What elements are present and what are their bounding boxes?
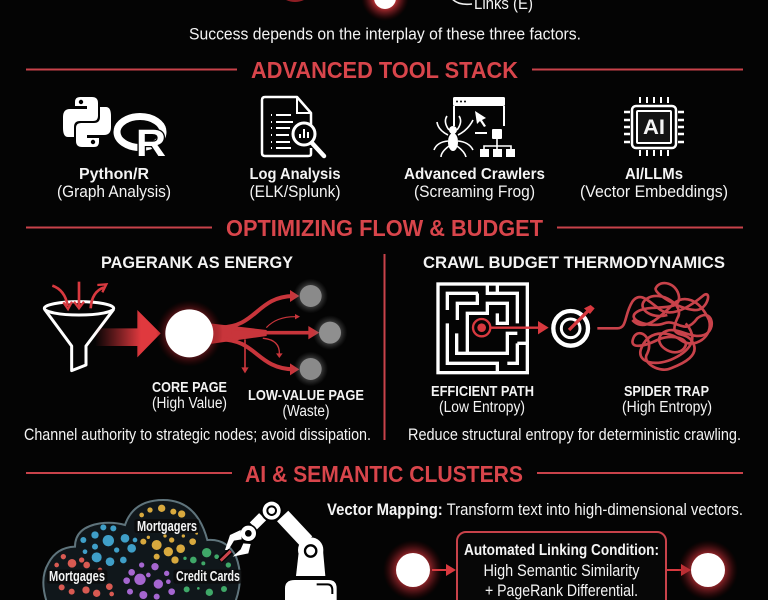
label: spider trap <box>622 384 712 416</box>
cluster: blue dots <box>80 524 137 566</box>
flows to low value pages <box>210 290 319 375</box>
label: mortgages: Mortgages <box>49 569 105 585</box>
tool: advanced crawlers: (Screaming Frog) <box>414 183 535 201</box>
cluster labels <box>47 519 242 584</box>
cluster: green dots <box>183 548 231 596</box>
label: core page: CORE PAGE <box>152 380 227 396</box>
icon: spider trap tangle <box>597 283 712 370</box>
cluster: red dots <box>54 554 114 597</box>
diagram: energy flow <box>44 279 347 386</box>
label: low value page: LOW-VALUE PAGE <box>248 388 364 404</box>
icon: AI chip <box>624 97 684 156</box>
icon: funnel <box>44 302 114 371</box>
node: target page <box>678 540 738 600</box>
cloud outline <box>43 500 240 600</box>
callout: automated linking condition <box>457 532 666 600</box>
text: success factors: Success depends on the interplay of these three factors. <box>189 24 581 44</box>
icon: spider, browser window and sitemap <box>434 97 515 157</box>
heading: AI and semantic clusters: AI & SEMANTIC CLUSTERS <box>245 461 523 487</box>
label: mortgagers: Mortgagers <box>137 519 197 535</box>
label: efficient path: (Low Entropy) <box>439 399 525 416</box>
icon: robot arm <box>220 500 337 600</box>
tool: Python/R: Python/R <box>79 166 149 183</box>
icon: python and R logos: R <box>136 123 166 165</box>
tool: advanced crawlers: Advanced Crawlers <box>404 166 545 183</box>
tool: log analysis <box>250 97 341 201</box>
label: core page: (High Value) <box>152 395 227 412</box>
node: source page <box>383 540 443 600</box>
label: efficient path <box>431 384 534 416</box>
tool: AI/LLMs: AI/LLMs <box>625 166 683 183</box>
label: efficient path: EFFICIENT PATH <box>431 384 534 400</box>
cluster: purple dots <box>123 562 175 600</box>
callout: automated linking condition: + PageRank Differential. <box>485 582 638 600</box>
label: low value page <box>248 388 364 420</box>
label: credit cards: Credit Cards <box>176 569 240 585</box>
tool: Python/R <box>57 97 171 201</box>
icon: maze <box>438 283 527 373</box>
icon: AI chip: AI <box>643 116 665 139</box>
node: core page <box>156 300 223 367</box>
panel: pagerank as energy <box>24 253 371 444</box>
arrow: condition to target <box>667 564 691 576</box>
panel: tool stack <box>57 97 728 201</box>
heading: advanced tool stack: ADVANCED TOOL STACK <box>251 57 518 83</box>
subheading: pagerank: PAGERANK AS ENERGY <box>101 253 294 272</box>
tool: Python/R: (Graph Analysis) <box>57 183 171 201</box>
nodes: low value pages <box>293 279 347 386</box>
icon: maze centre and path arrow <box>473 319 549 336</box>
caption: channel authority: Channel authority to strategic nodes; avoid dissipation. <box>24 426 371 444</box>
tool: advanced crawlers <box>404 97 545 201</box>
callout: automated linking condition: High Semantic Similarity <box>484 562 640 580</box>
tool: log analysis: Log Analysis <box>250 166 341 183</box>
icon: target <box>553 305 595 346</box>
subheading: crawl budget: CRAWL BUDGET THERMODYNAMICS <box>423 253 725 272</box>
tool: AI/LLMs: (Vector Embeddings) <box>580 183 728 201</box>
divider between panels <box>384 254 386 440</box>
arrows into funnel <box>52 282 106 309</box>
label: core page <box>152 380 227 412</box>
panel: crawl budget thermodynamics <box>408 253 741 444</box>
panel: vector mapping and linking <box>327 501 743 600</box>
arrow: source to condition <box>432 564 456 576</box>
tool: log analysis: (ELK/Splunk) <box>250 183 340 201</box>
tool: AI/LLMs <box>580 97 728 201</box>
cluster: yellow dots <box>139 505 198 564</box>
label: spider trap: SPIDER TRAP <box>624 384 709 400</box>
diagram: semantic cloud <box>43 500 242 600</box>
top diagram remnant: node and links label <box>286 0 533 21</box>
callout: automated linking condition: Automated Linking Condition: <box>464 542 659 559</box>
big arrow <box>95 310 161 357</box>
heading: optimizing flow and budget: OPTIMIZING FLOW & BUDGET <box>226 215 544 241</box>
text: vector mapping: Vector Mapping: Transform text into high-dimensional vectors. <box>327 501 743 519</box>
label: low value page: (Waste) <box>282 403 330 420</box>
diagram: maze, target and tangle <box>438 283 712 373</box>
label: spider trap: (High Entropy) <box>622 399 712 416</box>
icon: document and magnifier <box>262 97 324 156</box>
panel: semantic cloud and robot <box>43 500 337 600</box>
